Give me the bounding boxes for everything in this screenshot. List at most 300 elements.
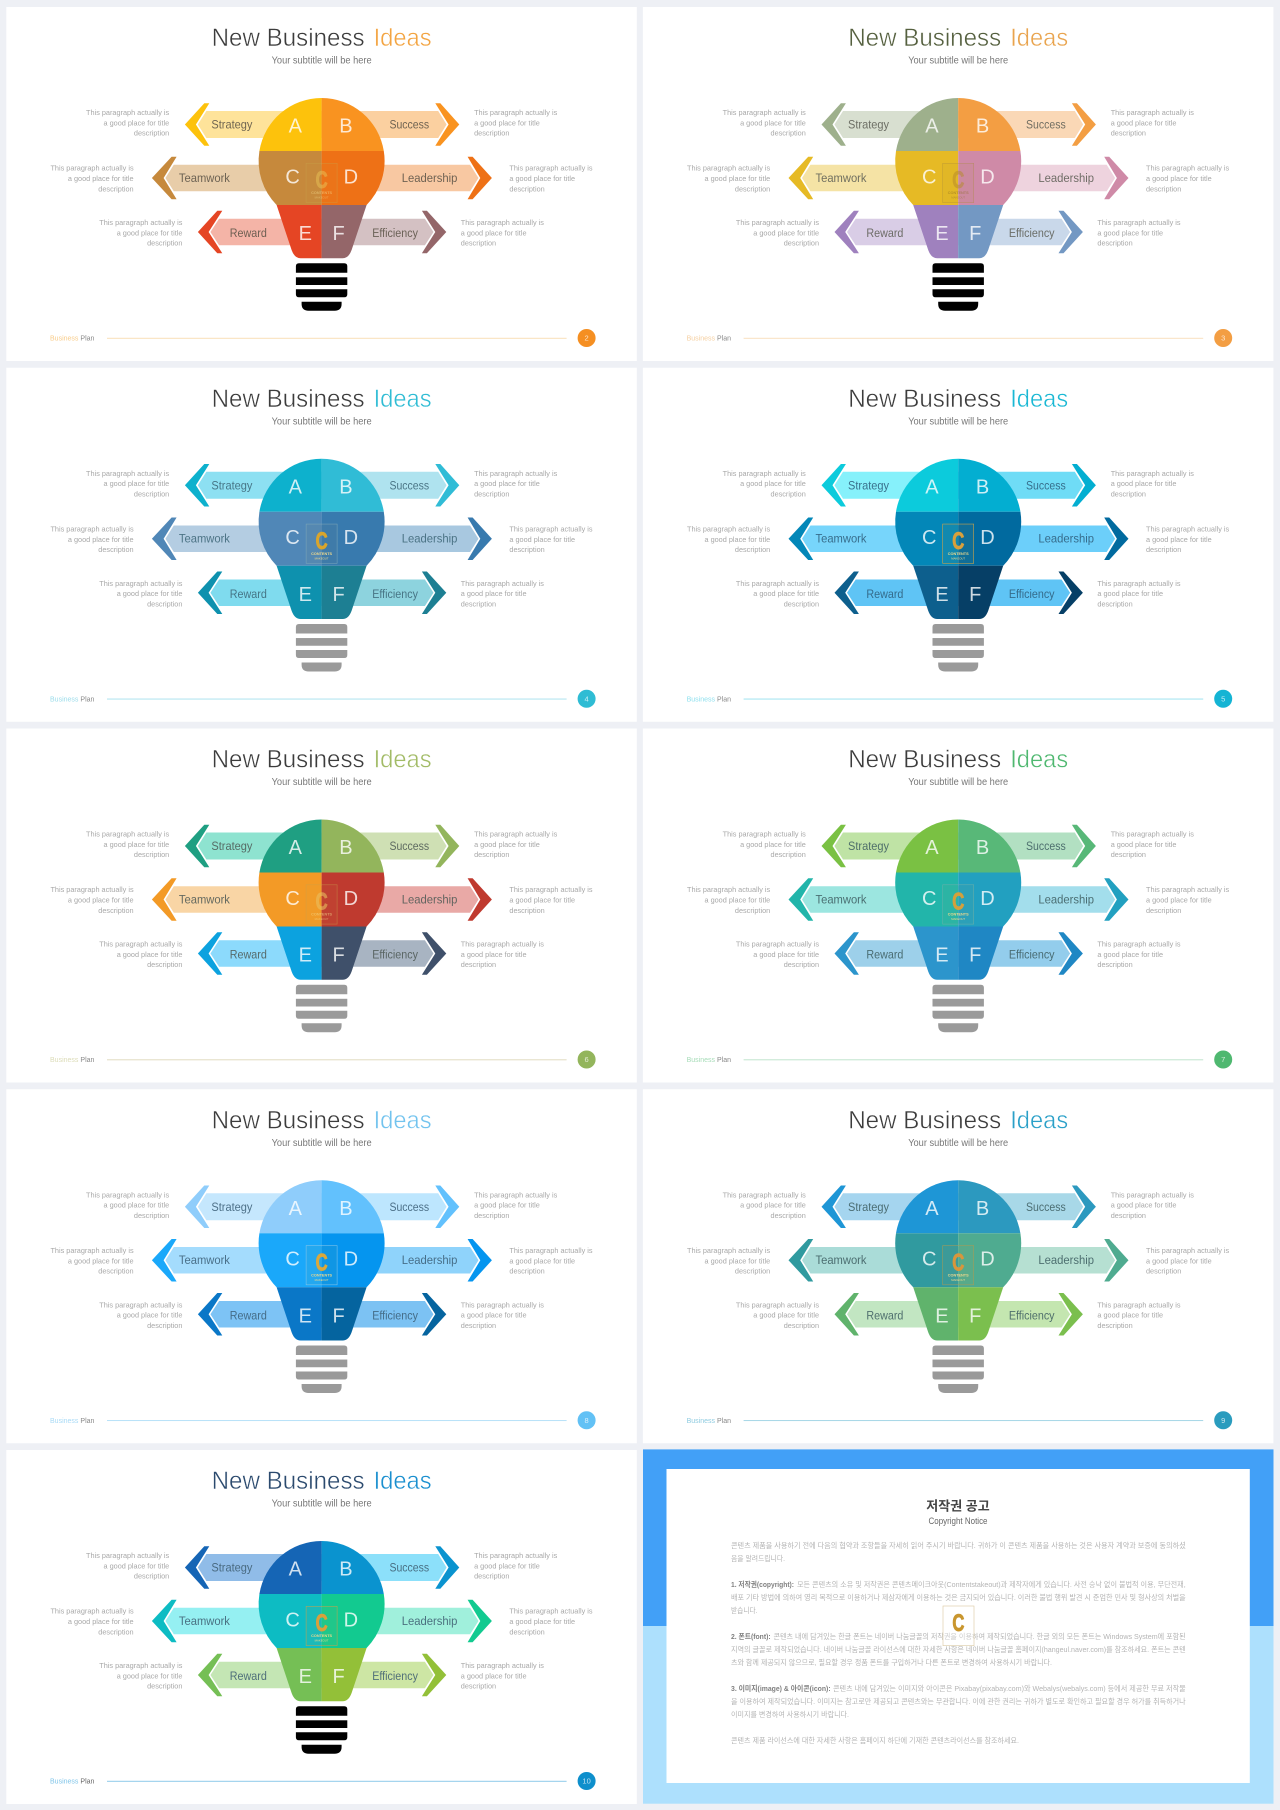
arrow: reward: Reward [866,948,903,962]
page number [578,1772,596,1790]
arrow: efficiency [322,211,446,253]
text: strategy description: a good place for title [740,479,806,488]
text: teamwork description: a good place for title [68,1256,134,1265]
icon: watermark badge [306,1246,337,1285]
title: New Business [212,385,365,413]
text: success description: description [474,129,509,138]
icon: watermark badge [306,524,337,563]
footer label: Business [50,1057,79,1064]
text: section 3 image and icon: 이미지를 변경하여 사용하시기 바랍니다. [731,1709,849,1719]
text: efficiency description: This paragraph actually is [461,579,544,588]
icon: light bulb: B [976,116,989,138]
text: leadership description: description [1146,1267,1181,1276]
text: success description: description [474,489,509,498]
text: success description: description [1111,129,1146,138]
text: teamwork description: description [98,184,134,193]
text: efficiency description: This paragraph actually is [461,218,544,227]
arrow: efficiency [322,1654,446,1696]
arrow: strategy: Strategy [848,1200,890,1214]
text: strategy description: description [134,129,169,138]
icon: watermark badge: MAKEOUT [951,556,965,560]
text: efficiency description: description [461,960,496,969]
text: strategy description: a good place for title [103,1201,169,1210]
text: success description: description [474,1572,509,1581]
text: success description: This paragraph actually is [1111,1190,1194,1199]
arrow: success: Success [1026,839,1066,853]
text: efficiency description: This paragraph actually is [1097,940,1181,948]
text: leadership description: This paragraph actually is [1146,164,1229,173]
icon: watermark badge: CONTENTS [948,912,969,916]
arrow: strategy [185,825,322,867]
icon: bulb base [296,1706,347,1754]
text: leadership description: This paragraph actually is [1146,524,1229,533]
arrow: strategy: Strategy [211,839,253,853]
icon: watermark badge: MAKEOUT [315,196,329,200]
icon: watermark badge: C [952,1249,964,1276]
page number: 2 [585,334,589,343]
text: strategy description: This paragraph actually is [723,1190,806,1199]
text: efficiency description: This paragraph actually is [461,1661,544,1670]
icon: light bulb: B [339,116,353,138]
text: strategy description: description [134,850,169,859]
text: teamwork description: This paragraph actually is [687,885,771,894]
icon: light bulb: F [969,223,981,245]
text: success description: a good place for title [474,479,540,488]
text: teamwork description: description [98,906,134,915]
text: reward description: description [147,1682,182,1691]
panel: slide 6 mixed [6,728,637,1082]
footer line [107,1420,567,1421]
arrow: success [322,1186,459,1228]
text: strategy description: description [134,1211,169,1220]
text: leadership description: description [509,1267,545,1276]
text: reward description: a good place for title [117,1311,182,1320]
text: reward description: This paragraph actually is [99,218,183,227]
title: New Business [212,1467,365,1495]
arrow: leadership [322,1239,492,1282]
text: reward description: description [784,599,819,608]
text: leadership description: description [509,1627,545,1636]
icon: watermark badge: CONTENTS [948,191,969,195]
footer label: Business [50,336,79,342]
text: strategy description: description [771,1211,806,1220]
icon: light bulb [895,98,1021,258]
icon: light bulb: E [299,584,312,606]
icon: watermark badge: MAKEOUT [315,1278,329,1282]
arrow: efficiency [322,571,446,614]
arrow: success: Success [389,1560,429,1574]
text: efficiency description: a good place for title [461,950,527,959]
icon: light bulb: C [285,527,300,549]
text: reward description: a good place for title [117,228,182,237]
icon: watermark badge: C [952,528,964,555]
page number: 5 [1221,694,1225,703]
text: success description: This paragraph actually is [474,1551,558,1560]
text: strategy description: a good place for title [103,118,169,127]
text: reward description: a good place for title [117,950,182,959]
icon: light bulb [259,98,385,258]
text: teamwork description: a good place for title [68,174,134,183]
text: teamwork description: description [98,1267,134,1276]
subtitle: Your subtitle will be here [908,777,1009,788]
text: teamwork description: This paragraph actually is [50,1246,134,1255]
arrow: teamwork [152,157,322,199]
arrow: teamwork [788,517,958,560]
text: strategy description: a good place for title [103,840,169,849]
subtitle: Your subtitle will be here [908,1138,1009,1149]
icon: light bulb: D [344,527,358,549]
text: reward description: description [147,599,182,608]
text: reward description: This paragraph actually is [736,218,819,227]
text: teamwork description: This paragraph actually is [687,164,771,173]
text: success description: This paragraph actually is [1111,469,1194,478]
icon: light bulb: D [344,166,358,188]
arrow: reward: Reward [230,587,267,601]
arrow: teamwork: Teamwork [179,1253,231,1267]
text: efficiency description: This paragraph actually is [1097,1300,1181,1309]
arrow: strategy: Strategy [211,1560,253,1574]
icon: light bulb [895,1180,1021,1341]
text: strategy description: This paragraph actually is [86,830,170,838]
text: success description: description [474,1211,509,1220]
text: reward description: a good place for title [753,1311,819,1320]
icon: light bulb [259,820,385,980]
icon: light bulb: E [935,223,949,245]
icon: watermark badge: C [952,888,964,916]
text: section 1 copyright: 1. 저작권(copyright): [731,1579,794,1589]
text: section 3 image and icon: 콘텐츠 내에 담겨있는 이미지와 아이콘은 Pixabay(pixabay.com)와 Webalys(webalys.com) 등에서 제공한 무료 저작물 [833,1683,1186,1693]
icon: light bulb: C [922,888,936,910]
arrow: success: Success [389,118,429,132]
footer line [107,338,567,339]
arrow: teamwork [152,878,322,921]
text: efficiency description: a good place for title [1097,589,1163,598]
text: section 2 font: 츠와 함께 제공되지 않으므로, 필요할 경우 정품 폰트를 구입하거나 다른 폰트로 변경하여 사용하시기 바랍니다. [731,1657,1052,1667]
icon: bulb base [932,263,984,311]
arrow: efficiency: Efficiency [1009,1308,1055,1322]
icon: watermark badge [306,1606,337,1646]
arrow: reward [834,211,958,253]
icon: light bulb: E [935,584,949,606]
text: leadership description: a good place for title [1146,535,1212,544]
icon: light bulb: B [339,837,353,859]
arrow: success: Success [389,1200,429,1214]
arrow: teamwork: Teamwork [816,532,867,546]
icon: watermark badge: C [316,888,328,916]
arrow: leadership: Leadership [1038,1253,1094,1267]
icon: light bulb: E [935,1305,949,1327]
icon: watermark badge: CONTENTS [311,1634,333,1638]
text: success description: This paragraph actually is [474,469,558,478]
title: Ideas [374,1467,432,1495]
text: teamwork description: a good place for title [704,896,770,904]
icon: watermark badge: MAKEOUT [951,917,965,921]
footer label: Plan [717,1057,731,1064]
arrow: success: Success [389,478,429,492]
text: reward description: a good place for title [117,1671,182,1680]
arrow: strategy [822,1186,958,1228]
text: success description: description [1111,489,1146,498]
title: Ideas [374,1106,432,1134]
text: leadership description: a good place for title [509,1256,575,1265]
arrow: teamwork [788,157,958,199]
panel: slide 9 blue-green [643,1089,1273,1443]
icon: light bulb: C [285,1609,300,1631]
text: closing line: 콘텐츠 제품 라이선스에 대한 자세한 사항은 홈페이지 하단에 기재한 콘텐츠라이선스를 참조하세요. [731,1735,1019,1745]
arrow: strategy [822,464,958,506]
icon: light bulb: F [969,584,981,606]
arrow: success [958,1186,1096,1228]
footer line [744,338,1203,339]
text: efficiency description: description [461,599,496,608]
icon: light bulb: F [969,1305,981,1327]
text: strategy description: This paragraph actually is [86,469,170,478]
arrow: success: Success [389,839,429,853]
icon: watermark badge: CONTENTS [311,191,333,195]
text: reward description: description [784,239,819,248]
text: teamwork description: a good place for title [68,535,134,544]
text: efficiency description: This paragraph actually is [1097,579,1181,588]
footer label: Business [687,1057,716,1064]
arrow: reward [834,571,958,614]
arrow: reward [198,1293,322,1336]
arrow: efficiency: Efficiency [372,226,419,240]
title: Ideas [374,24,432,52]
arrow: efficiency [322,1293,446,1336]
icon: light bulb: F [332,223,345,245]
arrow: strategy: Strategy [211,478,253,492]
arrow: efficiency: Efficiency [1009,226,1055,240]
text: reward description: a good place for title [117,589,182,598]
arrow: strategy: Strategy [848,118,890,132]
text: strategy description: a good place for title [103,479,169,488]
arrow: teamwork: Teamwork [179,532,231,546]
text: leadership description: a good place for title [509,896,575,904]
icon: watermark badge: C [952,1610,964,1637]
text: section 1 copyright: 모든 콘텐츠의 소유 및 저작권은 콘텐츠메이크아웃(Contentstakeout)과 제작자에게 있습니다. 사전 승낙 없이 불법적 이용, 무단전재, [797,1579,1186,1589]
text: efficiency description: a good place for title [1097,228,1163,237]
arrow: strategy: Strategy [848,839,890,853]
arrow: reward: Reward [230,948,267,962]
arrow: efficiency [958,211,1083,253]
text: success description: This paragraph actually is [474,108,558,117]
arrow: success [322,464,459,506]
title: Ideas [374,385,432,413]
text: leadership description: This paragraph actually is [1146,1246,1229,1255]
text: success description: This paragraph actually is [1111,108,1194,117]
text: success description: a good place for title [474,1561,540,1570]
text: intro paragraph [731,1540,1186,1563]
icon: light bulb: C [922,166,936,188]
arrow: teamwork: Teamwork [179,1614,231,1628]
text: teamwork description: This paragraph actually is [50,524,134,533]
text: teamwork description: description [735,906,770,915]
footer label: Plan [717,696,731,703]
page number [1214,329,1232,347]
icon: light bulb: C [922,527,936,549]
arrow: leadership [958,157,1128,199]
icon: light bulb: A [289,1198,303,1220]
text: reward description: This paragraph actually is [99,940,183,948]
text: success description: a good place for title [1111,479,1176,488]
icon: light bulb: A [925,1198,939,1220]
icon: light bulb: A [289,476,303,498]
icon: light bulb: D [344,888,358,910]
arrow: success [322,1546,459,1589]
panel: slide 4 teal [6,368,637,722]
footer label: Plan [80,1778,95,1786]
arrow: strategy [185,1186,322,1228]
icon: bulb base [296,624,347,671]
text: leadership description: This paragraph actually is [509,1246,593,1255]
text: intro paragraph: 콘텐츠 제품을 사용하기 전에 다음의 협약과 조항들을 자세히 읽어 주시기 바랍니다. 귀하가 이 콘텐츠 제품을 사용하는 것은 사용자 계약과 보증에 동의하셨 [731,1540,1186,1550]
icon: light bulb: F [332,1305,345,1327]
text: success description: description [1111,850,1146,859]
arrow: leadership: Leadership [402,892,458,906]
text: teamwork description: a good place for title [704,1256,770,1265]
heading: copyright notice English: Copyright Notice [928,1516,988,1527]
icon: light bulb: F [332,944,345,966]
text: strategy description: a good place for title [740,118,806,127]
icon: light bulb: B [339,1198,353,1220]
icon: watermark badge: CONTENTS [948,1273,969,1277]
text: section 3 image and icon: 3. 이미지(image) & 아이콘(icon): [731,1683,831,1693]
arrow: efficiency: Efficiency [1009,948,1055,962]
text: strategy description: description [771,129,806,138]
text: success description: a good place for title [1111,1201,1176,1210]
panel: slide 5 deep blue [643,368,1273,722]
icon: light bulb: D [980,1249,995,1271]
text: teamwork description: description [735,545,770,554]
arrow: leadership: Leadership [1038,892,1094,906]
footer line [744,699,1203,700]
page number: 8 [585,1416,589,1425]
arrow: teamwork: Teamwork [816,1253,867,1267]
arrow: efficiency [958,932,1083,975]
icon: watermark badge: C [316,1610,328,1637]
arrow: leadership: Leadership [402,171,458,185]
text: section 2 font: 콘텐츠 내에 담겨있는 한글 폰트는 네이버 나눔글꼴의 저작권을 이용하여 제작되었습니다. 한글 외의 모든 폰트는 Windows System에 포함된 [774,1631,1186,1641]
arrow: efficiency: Efficiency [372,1669,419,1683]
panel: slide 10 vivid blue-green [6,1450,637,1804]
text: efficiency description: This paragraph actually is [461,940,544,948]
text: teamwork description: This paragraph actually is [50,1607,134,1616]
arrow: success [958,825,1096,867]
footer label: Plan [80,1418,95,1425]
text: efficiency description: description [1097,239,1133,248]
text: strategy description: This paragraph actually is [86,108,170,117]
arrow: leadership [322,1600,492,1642]
icon: bulb base [296,985,347,1032]
arrow: reward [834,932,958,975]
title: Ideas [1010,746,1068,774]
text: strategy description: description [134,489,169,498]
arrow: reward [198,1654,322,1696]
arrow: efficiency [958,571,1083,614]
text: reward description: This paragraph actually is [736,940,819,948]
icon: light bulb [259,1541,385,1701]
text: section 2 font: 지역의 글꼴로 제작되었습니다. 네이버 나눔글꼴 라이선스에 대한 자세한 사항은 네이버 나눔글꼴 홈페이지(hangeul.naver.com)를 참조하세요. 폰트는 콘텐 [731,1644,1186,1654]
icon: light bulb: F [332,584,345,606]
text: success description: a good place for title [474,840,540,849]
text: reward description: description [147,960,182,969]
text: strategy description: description [771,489,806,498]
icon: light bulb: D [980,166,995,188]
page number [1214,1411,1232,1429]
arrow: success: Success [1026,1200,1066,1214]
title: New Business [212,24,365,52]
text: strategy description: This paragraph actually is [86,1190,170,1199]
arrow: leadership [322,157,492,199]
text: strategy description: This paragraph actually is [723,830,806,838]
text: strategy description: description [771,850,806,859]
footer label: Plan [80,1057,95,1064]
text: leadership description: a good place for title [509,174,575,183]
text: efficiency description: description [1097,960,1133,969]
text: efficiency description: description [1097,1321,1133,1330]
text: success description: a good place for title [1111,840,1176,849]
text: teamwork description: a good place for title [68,896,134,904]
text: reward description: description [784,1321,819,1330]
page number [1214,1050,1232,1068]
arrow: teamwork [788,1239,958,1282]
page number [578,329,596,347]
icon: watermark badge [943,524,974,563]
icon: watermark badge: C [316,1249,328,1276]
icon: watermark badge [306,885,337,924]
arrow: leadership [958,1239,1128,1282]
text: teamwork description: This paragraph actually is [687,524,771,533]
text: strategy description: This paragraph actually is [723,108,806,117]
page number: 10 [582,1777,591,1786]
title: Ideas [1010,385,1068,413]
arrow: strategy [185,103,322,146]
text: reward description: This paragraph actually is [736,579,819,588]
text: success description: This paragraph actually is [1111,830,1194,838]
icon: watermark badge: MAKEOUT [315,917,329,921]
text: efficiency description: This paragraph actually is [461,1300,544,1309]
text: efficiency description: a good place for title [461,228,527,237]
page number [578,1411,596,1429]
title: New Business [212,746,365,774]
arrow: leadership: Leadership [402,532,458,546]
icon: watermark badge: C [316,528,328,555]
arrow: efficiency: Efficiency [372,1308,419,1322]
page number: 9 [1221,1416,1225,1425]
icon: light bulb: B [339,476,353,498]
icon: watermark badge: CONTENTS [311,1273,333,1277]
icon: light bulb: F [332,1666,345,1688]
panel: copyright notice [643,1449,1274,1804]
arrow: leadership: Leadership [1038,171,1094,185]
text: strategy description: This paragraph actually is [86,1551,170,1560]
icon: watermark badge: MAKEOUT [951,1278,965,1282]
title: Ideas [1010,24,1068,52]
arrow: success: Success [1026,118,1066,132]
arrow: strategy: Strategy [211,1200,253,1214]
icon: light bulb: E [299,1666,312,1688]
text: efficiency description: a good place for title [1097,1311,1163,1320]
text: teamwork description: a good place for title [704,535,770,544]
arrow: reward: Reward [866,226,903,240]
arrow: efficiency [958,1293,1083,1336]
text: teamwork description: This paragraph actually is [687,1246,771,1255]
subtitle: Your subtitle will be here [272,1138,372,1149]
arrow: success: Success [1026,478,1066,492]
text: leadership description: description [1146,184,1181,193]
title: Ideas [1010,1106,1068,1134]
arrow: efficiency: Efficiency [372,948,419,962]
